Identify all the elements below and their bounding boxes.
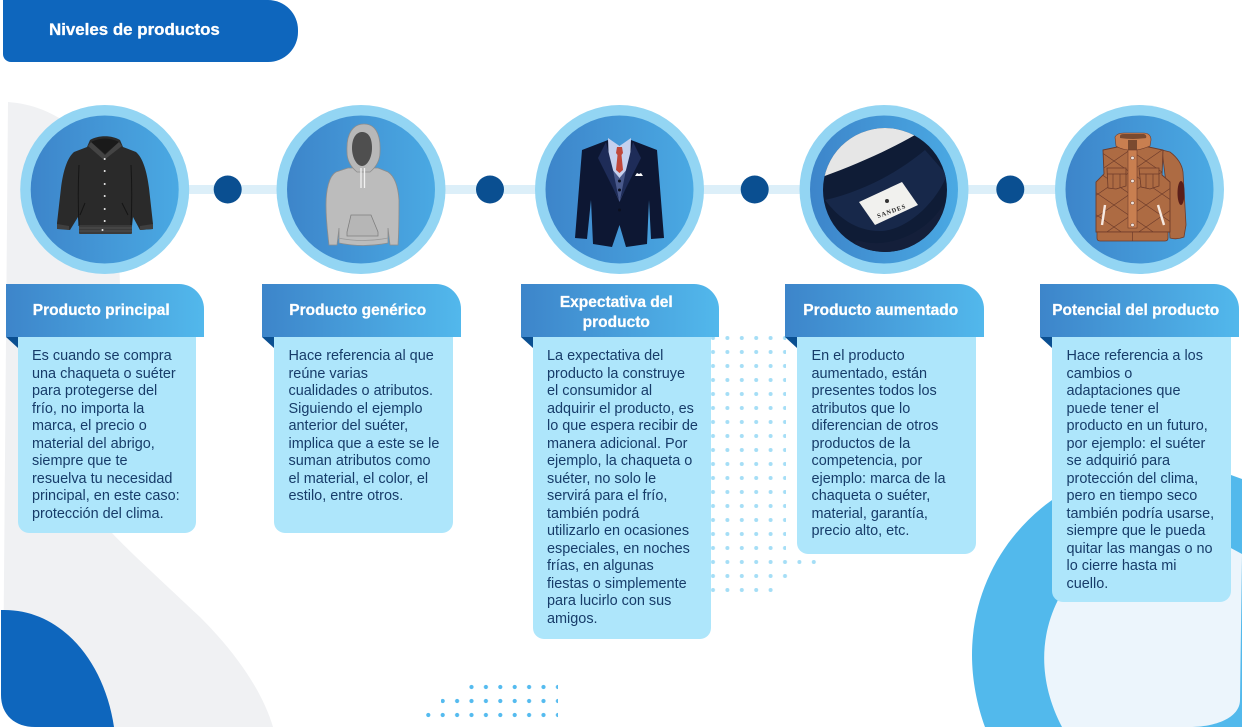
text block: producto aumentado: competencia, por <box>812 453 922 469</box>
panel: producto principal <box>6 284 204 533</box>
panel: producto genérico <box>262 284 461 533</box>
ribbon fold <box>6 337 18 348</box>
text block: producto genérico: anterior del suéter, <box>288 418 408 434</box>
text block: expectativa del producto: producto la construye <box>547 366 685 382</box>
text block: producto aumentado: atributos que lo <box>812 400 910 416</box>
text block: expectativa del producto: el consumidor al <box>547 383 652 399</box>
heading: potencial del producto <box>1040 284 1238 337</box>
text block: potencial del producto: por ejemplo: el suéter <box>1066 436 1205 452</box>
text block: producto principal: siempre que te <box>32 453 128 469</box>
ribbon fold <box>262 337 274 348</box>
text block: potencial del producto: producto en un futuro, <box>1066 418 1208 434</box>
icon: navy suit <box>535 105 704 274</box>
heading: producto aumentado: Producto aumentado <box>803 302 958 319</box>
heading: expectativa del producto: Expectativa del <box>560 294 673 311</box>
text block: producto principal: para protegerse del <box>32 383 157 399</box>
text block: expectativa del producto: para lucirlo con sus <box>547 593 671 609</box>
heading: expectativa del producto <box>520 284 719 337</box>
text block: expectativa del producto <box>532 337 711 639</box>
text block: producto genérico: estilo, entre otros. <box>288 488 403 504</box>
text block: producto genérico: Hace referencia al que <box>288 348 434 364</box>
text block: expectativa del producto: manera adicional. Por <box>547 436 687 452</box>
timeline node 4 <box>996 176 1024 204</box>
text block: expectativa del producto: fiestas o simplemente <box>547 576 687 592</box>
text block: producto aumentado: aumentado, están <box>812 366 927 382</box>
text block: producto aumentado <box>797 337 976 554</box>
panel: producto aumentado <box>785 284 984 554</box>
title: Niveles de productos <box>49 20 220 39</box>
text block: expectativa del producto: también podrá <box>547 506 639 522</box>
icon: sweater label photo <box>800 105 968 274</box>
panel: potencial del producto <box>1040 284 1239 602</box>
heading: producto principal: Producto principal <box>33 302 170 319</box>
icon: brown quilted jacket <box>1055 105 1224 274</box>
text block: producto principal: marca, el precio o <box>32 418 147 434</box>
heading: expectativa del producto: producto <box>583 314 650 331</box>
text block: potencial del producto: también podría usarse, <box>1066 506 1214 522</box>
text block: producto principal: frío, no importa la <box>32 400 144 416</box>
text block: potencial del producto: siempre que le pueda <box>1066 523 1205 539</box>
text block: expectativa del producto: servirá para el frío, <box>547 488 667 504</box>
icon: grey hoodie <box>276 105 446 274</box>
panel: expectativa del producto <box>521 284 719 639</box>
text block: producto genérico: implica que a este se le <box>288 436 439 452</box>
background shape: light blue circle <box>972 465 1242 727</box>
text block: producto principal: Es cuando se compra <box>32 348 172 364</box>
text block: producto aumentado: presentes todos los <box>812 383 937 399</box>
text block: potencial del producto: lo cierre hasta mi <box>1066 558 1176 574</box>
text block: potencial del producto: Hace referencia a los <box>1066 348 1203 364</box>
text block: producto genérico: reúne varias <box>288 366 368 382</box>
text block: potencial del producto: se adquirió para <box>1066 453 1170 469</box>
text block: producto aumentado: En el producto <box>812 348 905 364</box>
text block: expectativa del producto: lo que espera recibir de <box>547 418 698 434</box>
ribbon fold <box>520 337 532 348</box>
text block: potencial del producto: adaptaciones que <box>1066 383 1180 399</box>
background shape: grey swoosh <box>3 102 273 727</box>
text block: potencial del producto: protección del clima, <box>1066 470 1198 486</box>
text block: potencial del producto: cuello. <box>1066 576 1108 592</box>
icon: sweater label photo: SANDES <box>876 203 907 220</box>
text block: producto aumentado: material, garantía, <box>812 506 928 522</box>
timeline node 2 <box>476 176 504 204</box>
heading: producto aumentado <box>785 284 984 337</box>
text block: producto genérico: Siguiendo el ejemplo <box>288 400 423 416</box>
timeline node 1 <box>214 176 242 204</box>
text block: producto principal: principal, en este caso: <box>32 488 180 504</box>
dot pattern: bottom <box>424 681 558 720</box>
ribbon fold <box>1040 337 1052 348</box>
text block: producto genérico <box>274 337 452 533</box>
heading: producto principal <box>6 284 204 337</box>
heading: producto genérico: Producto genérico <box>289 302 426 319</box>
title banner <box>3 0 298 62</box>
text block: expectativa del producto: frías, en algunas <box>547 558 654 574</box>
ribbon fold <box>785 337 797 348</box>
text block: expectativa del producto: especiales, en noches <box>547 540 690 556</box>
text block: producto aumentado: diferencian de otros <box>812 418 938 434</box>
icon: black bomber jacket <box>20 105 189 274</box>
text block: producto aumentado: chaqueta o suéter, <box>812 488 930 504</box>
text block: producto principal: material del abrigo, <box>32 436 155 452</box>
text block: potencial del producto: puede tener el <box>1066 400 1159 416</box>
heading: potencial del producto: Potencial del producto <box>1052 302 1219 319</box>
text block: potencial del producto: quitar las mangas o no <box>1066 540 1213 556</box>
text block: producto principal: protección del clima. <box>32 506 164 522</box>
text block: expectativa del producto: amigos. <box>547 610 598 626</box>
text block: producto genérico: cualidades o atributos. <box>288 383 433 399</box>
text block: expectativa del producto: La expectativa del <box>547 348 663 364</box>
text block: expectativa del producto: utilizarlo en ocasiones <box>547 523 689 539</box>
dot pattern: center <box>711 335 817 596</box>
text block: producto principal: resuelva tu necesidad <box>32 470 172 486</box>
text block: expectativa del producto: ejemplo, la chaqueta o <box>547 453 692 469</box>
text block: producto aumentado: precio alto, etc. <box>812 523 909 539</box>
text block: producto genérico: suman atributos como <box>288 453 431 469</box>
text block: potencial del producto: pero en tiempo seco <box>1066 488 1197 504</box>
text block: potencial del producto <box>1052 337 1230 602</box>
text block: producto principal: una chaqueta o suéter <box>32 366 176 382</box>
timeline node 3 <box>741 176 769 204</box>
text block: expectativa del producto: suéter, no solo le <box>547 470 656 486</box>
background shape: pale blue circle <box>1044 527 1242 727</box>
background shape: blue corner <box>1 610 114 727</box>
text block: producto aumentado: ejemplo: marca de la <box>812 470 946 486</box>
text block: producto principal <box>18 337 196 533</box>
timeline connector <box>100 185 1140 194</box>
text block: potencial del producto: cambios o <box>1066 366 1132 382</box>
text block: producto aumentado: productos de la <box>812 436 910 452</box>
text block: expectativa del producto: adquirir el producto, es <box>547 400 694 416</box>
heading: producto genérico <box>262 284 460 337</box>
text block: producto genérico: el material, el color, el <box>288 470 428 486</box>
